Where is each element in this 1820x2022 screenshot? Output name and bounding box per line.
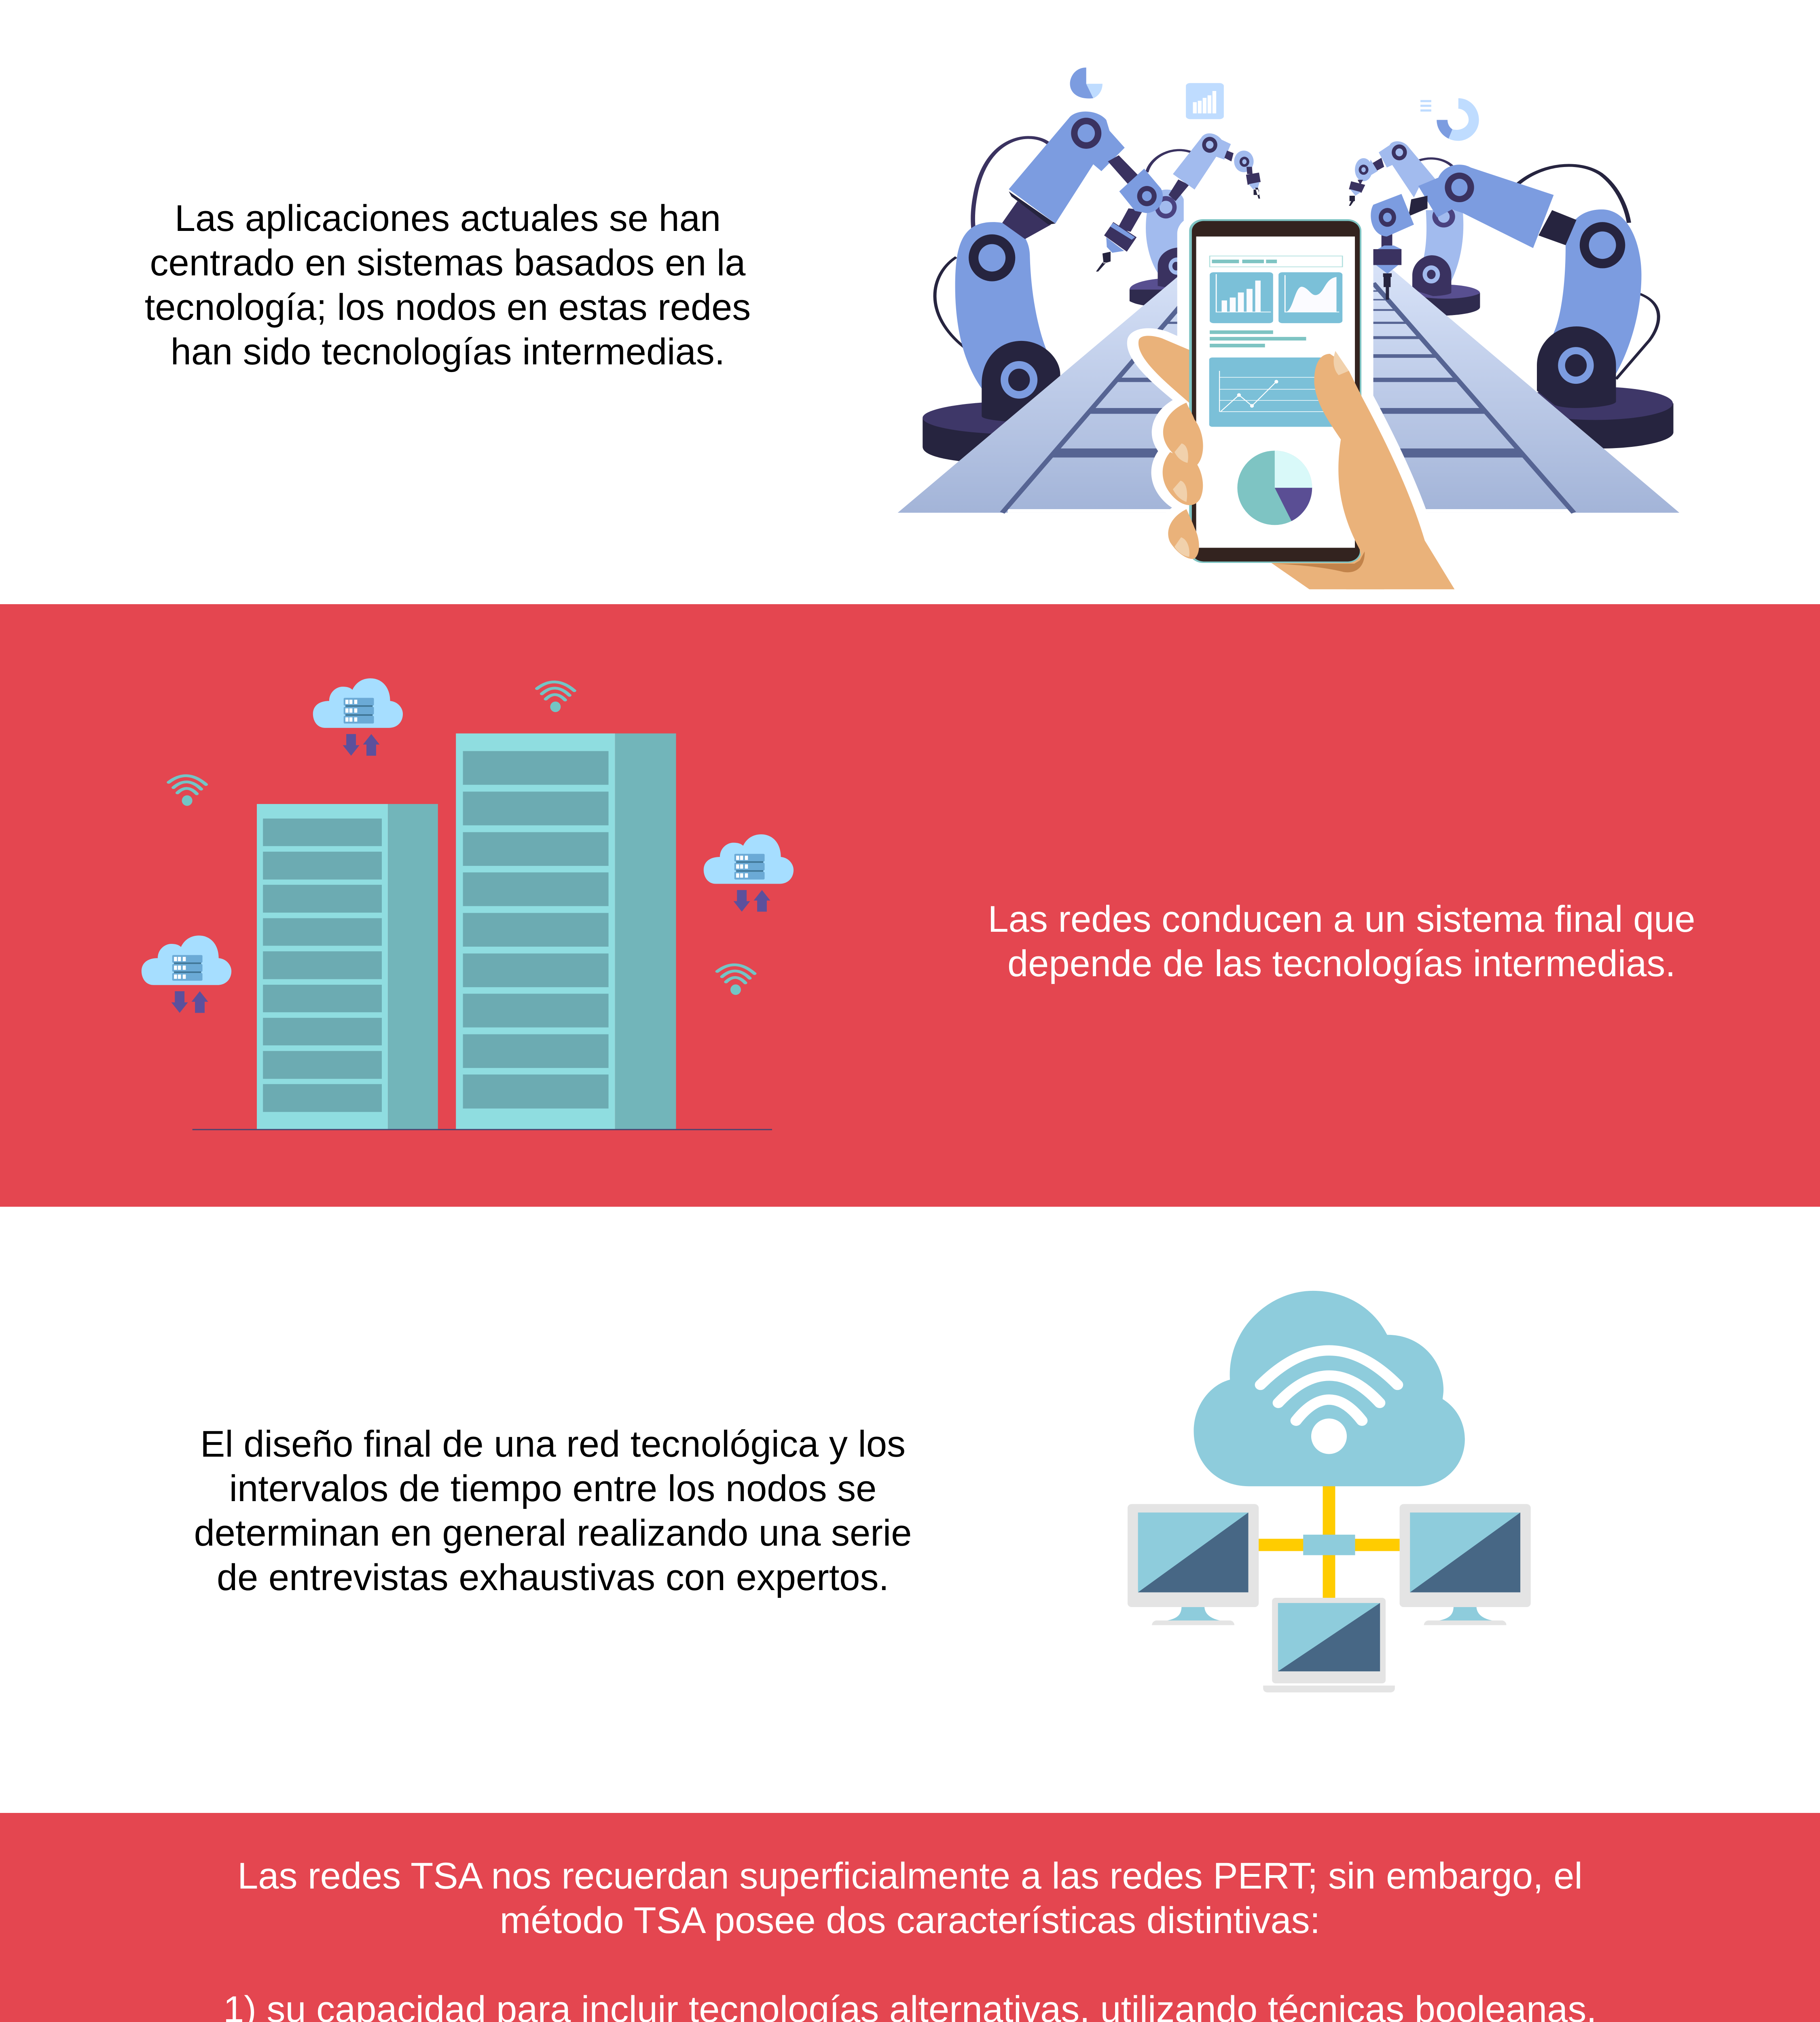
hand in front of phone [1163, 351, 1454, 589]
robot tool head over track [1371, 194, 1414, 300]
right monitor [1400, 1504, 1531, 1625]
text block: redes conducen [988, 899, 1695, 984]
panel: red band 4 [0, 1813, 1820, 2022]
pie chart [1237, 451, 1312, 525]
text block: diseño final: intervalos de tiempo entre los nodos se [229, 1468, 876, 1509]
text block: diseño final: El diseño final de una red tecnológica y los [200, 1423, 906, 1465]
right building [456, 734, 676, 1129]
back left robot [1130, 133, 1261, 306]
hub [1303, 1535, 1355, 1555]
text block: redes TSA [223, 1855, 1597, 2022]
text block: diseño final [194, 1423, 912, 1598]
cloud with wifi [1194, 1291, 1465, 1486]
text block: redes TSA: método TSA posee dos características distintivas: [500, 1900, 1320, 1941]
text block: diseño final: determinan en general realizando una serie [194, 1512, 912, 1554]
area chart card [1278, 272, 1342, 323]
fingernails [1173, 443, 1189, 557]
icon: floating bar chart [1186, 83, 1224, 119]
icon: cloud server top [313, 678, 403, 756]
text lines [1210, 330, 1306, 347]
icon: floating pie chart [1070, 68, 1103, 99]
icon: cloud server left [142, 935, 231, 1013]
hand behind phone [1139, 336, 1384, 589]
text block: aplicaciones actuales: Las aplicaciones actuales se han [175, 198, 721, 239]
conveyor track [898, 254, 1679, 513]
fingers [1163, 403, 1203, 559]
line chart card [1209, 357, 1341, 427]
laptop [1263, 1598, 1395, 1692]
text block: aplicaciones actuales [145, 198, 751, 372]
icon: wifi right [717, 965, 755, 995]
smartphone [1189, 219, 1361, 563]
left building [257, 804, 438, 1129]
header bar [1210, 256, 1342, 267]
panel: red band 2 [0, 604, 1820, 1207]
thumb and palm [1273, 351, 1454, 589]
text block: aplicaciones actuales: tecnología; los nodos en estas redes [145, 287, 751, 328]
icon: cloud server right [704, 834, 794, 912]
ground line [193, 1129, 772, 1130]
big right robot [1409, 165, 1674, 448]
text block: diseño final: de entrevistas exhaustivas con expertos. [217, 1557, 889, 1598]
bar chart card [1210, 272, 1273, 323]
illustration: server buildings with clouds [142, 678, 794, 1130]
left monitor [1128, 1504, 1259, 1625]
big left robot [923, 112, 1163, 461]
illustration: cloud network [1128, 1291, 1531, 1692]
text block: aplicaciones actuales: han sido tecnologías intermedias. [171, 331, 725, 372]
illustration: robots and smartphone [898, 68, 1679, 589]
icon: wifi top [537, 682, 574, 712]
text block: redes conducen: Las redes conducen a un sistema final que [988, 899, 1695, 940]
white halo around phone and hand [1139, 216, 1444, 575]
text block: redes TSA: Las redes TSA nos recuerdan superficialmente a las redes PERT; sin embargo, el [237, 1855, 1583, 1897]
icon: floating donut chart [1420, 98, 1479, 141]
text block: aplicaciones actuales: centrado en sistemas basados en la [150, 242, 746, 283]
icon: wifi left [169, 776, 206, 806]
back right robot [1349, 141, 1480, 315]
connectors [1257, 1485, 1402, 1599]
text block: redes conducen: depende de las tecnologías intermedias. [1007, 943, 1676, 984]
